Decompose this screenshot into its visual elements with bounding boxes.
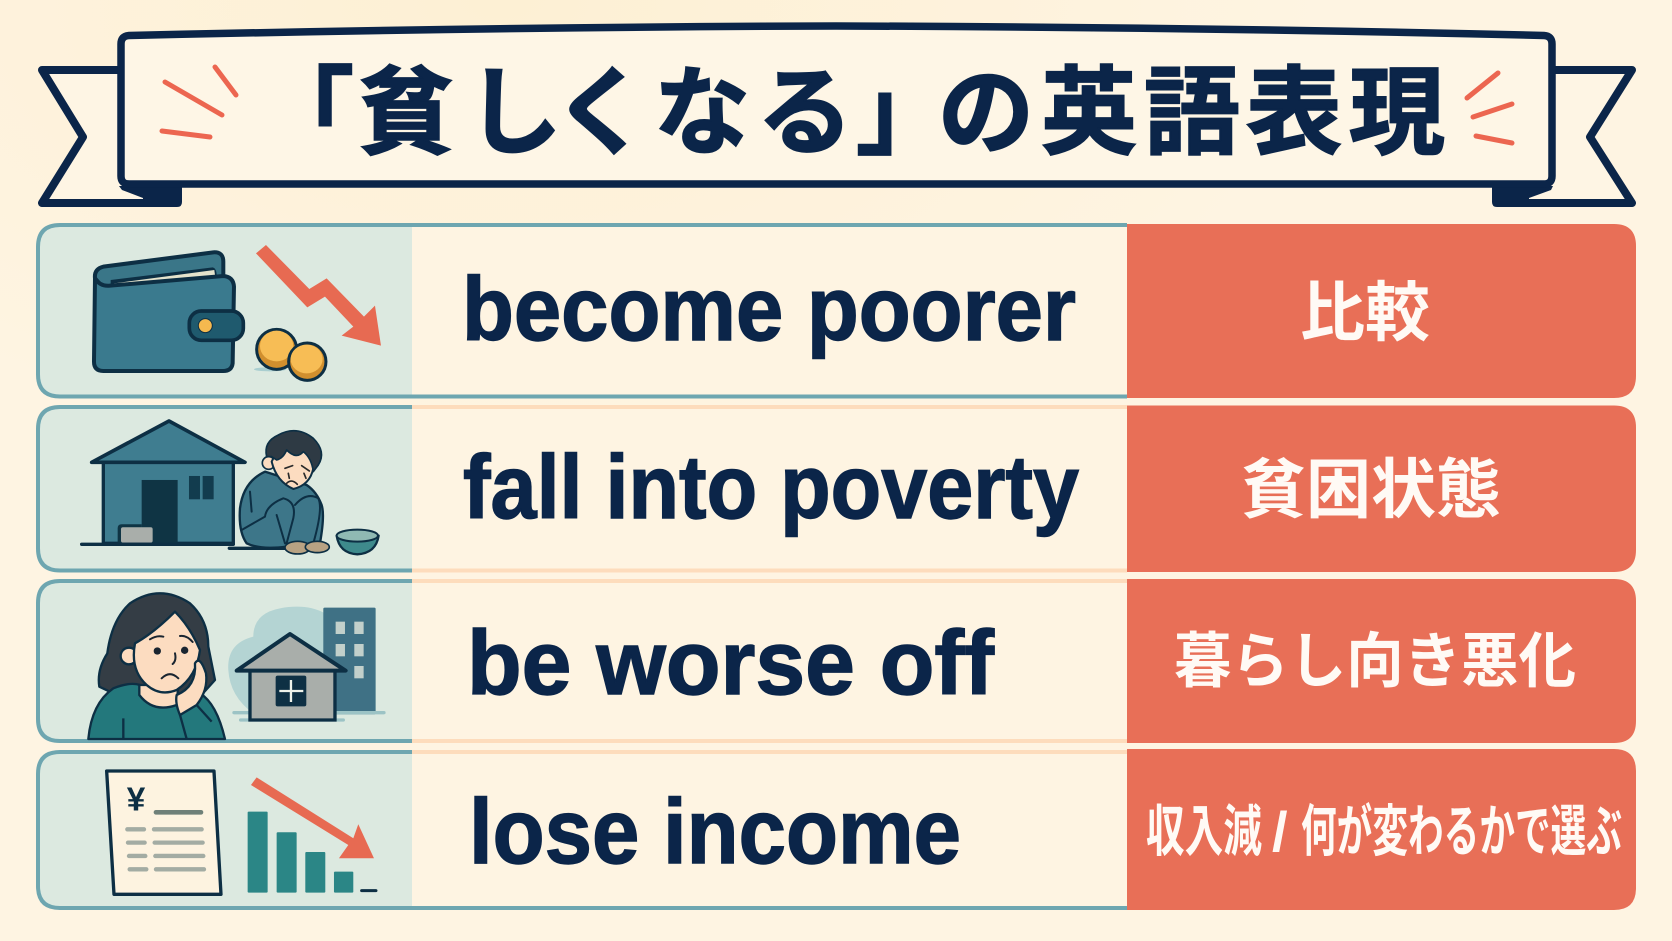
row 3: be worse off <box>38 579 1636 743</box>
icon panel <box>38 407 412 570</box>
ribbon tail left <box>42 70 145 203</box>
title text: 「貧しくなる」の英語表現 <box>258 60 1445 167</box>
cream body <box>412 407 1127 570</box>
japanese label: 収入減 <box>1146 800 1262 863</box>
row 4: lose income <box>38 749 1636 910</box>
icon panel <box>38 581 412 741</box>
icon: pay slip and declining bars: ¥ <box>127 782 146 819</box>
row 1: become poorer <box>38 224 1636 398</box>
title banner <box>42 26 1632 207</box>
ribbon fold left <box>119 186 182 207</box>
cream body <box>412 752 1127 908</box>
banner box <box>121 26 1552 184</box>
japanese label <box>1146 800 1622 863</box>
red label <box>1127 579 1636 743</box>
icon: pay slip and declining bars <box>107 771 376 894</box>
japanese label: 暮らし向き悪化 <box>1174 628 1576 695</box>
english phrase: fall into poverty <box>463 438 1079 538</box>
japanese label: 貧困状態 <box>1241 453 1501 526</box>
icon panel <box>38 225 412 396</box>
icon: house and sitting person <box>82 421 379 554</box>
ribbon tail right <box>1529 70 1632 203</box>
red label <box>1127 749 1636 910</box>
spark lines left <box>162 67 236 137</box>
red label <box>1127 406 1636 572</box>
red label <box>1127 224 1636 398</box>
cream body <box>412 225 1127 396</box>
english phrase: lose income <box>469 781 961 883</box>
cream body <box>412 581 1127 741</box>
spark lines right <box>1467 73 1512 143</box>
icon panel <box>38 752 412 908</box>
icon: wallet, coins and falling arrow <box>94 245 381 380</box>
japanese label: / <box>1272 800 1288 863</box>
row 2: fall into poverty <box>38 406 1636 572</box>
english phrase: become poorer <box>462 260 1076 360</box>
icon: worried woman with house and building <box>88 593 384 739</box>
japanese label: 比較 <box>1300 276 1430 349</box>
ribbon fold right <box>1492 186 1553 207</box>
english phrase: be worse off <box>467 613 995 714</box>
